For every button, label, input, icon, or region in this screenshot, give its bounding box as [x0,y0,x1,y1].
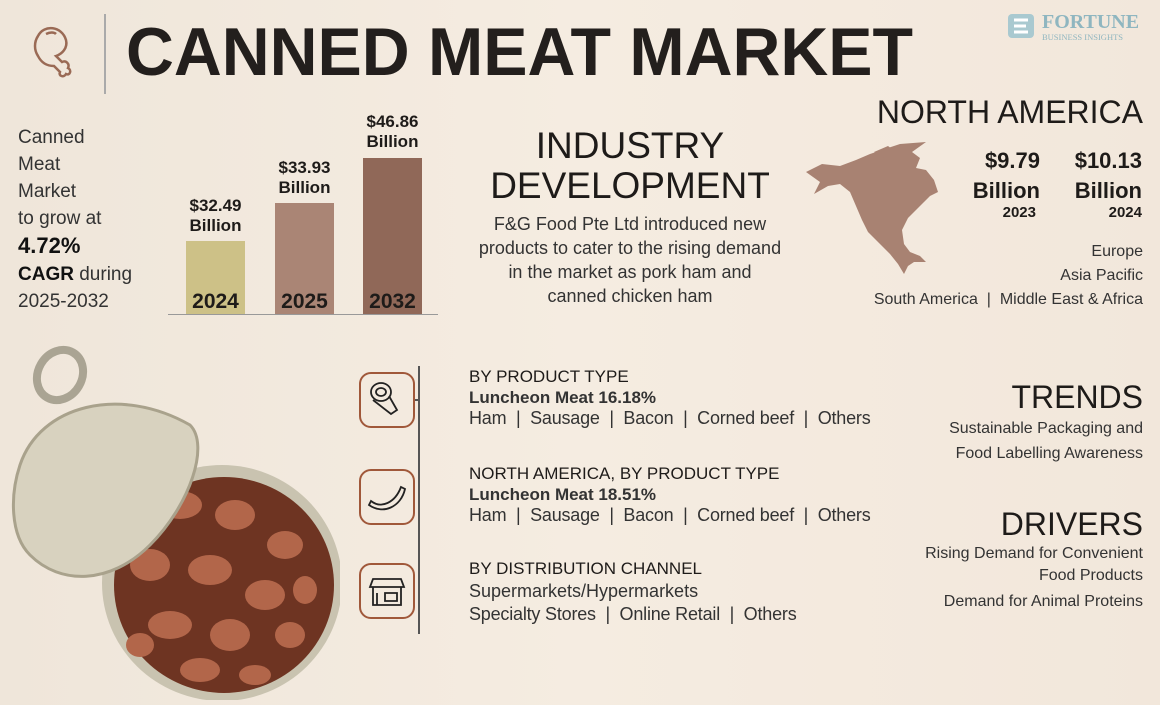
bar chart: $32.49 [190,196,242,215]
bar chart: Billion [367,132,418,151]
segment: NA product type [469,464,871,525]
logo: FORTUNE [1042,11,1139,33]
segment: distribution: Specialty Stores | Online Retail | Others [469,604,796,624]
segments panel [359,366,871,634]
text: CAGR: to grow at [18,208,101,229]
bar chart: 2032 [369,290,416,313]
segment: product type: BY PRODUCT TYPE [469,367,629,386]
regions [874,243,1144,308]
segment: NA product type: Luncheon Meat 18.51% [469,485,656,504]
text: CAGR: CAGR during [18,264,132,285]
text: 2023 [1003,204,1036,221]
icon: chicken leg [34,26,72,78]
logo [1008,11,1139,42]
na values: Billion [973,178,1040,203]
trends: TRENDS [1011,379,1143,415]
trends [949,379,1143,462]
divider [104,14,106,94]
bar chart: $46.86 [366,112,418,131]
title: CANNED MEAT MARKET [126,14,913,90]
drivers: Demand for Animal Proteins [944,593,1143,610]
industry development: products to cater to the rising demand [479,238,781,258]
image: open can [12,346,340,700]
text: CAGR: Meat [18,154,60,175]
segment: distribution: Supermarkets/Hypermarkets [469,581,698,601]
industry development: F&G Food Pte Ltd introduced new [494,214,766,234]
segment: NA product type: NORTH AMERICA, BY PRODUCT TYPE [469,464,779,483]
text: CAGR: 4.72% [18,233,80,258]
text: CAGR: 2025-2032 [18,291,109,312]
north america heading: NORTH AMERICA [877,94,1143,130]
na values [973,148,1040,203]
bar chart [168,112,438,315]
segment: NA product type: Ham | Sausage | Bacon | Corned beef | Others [469,505,871,525]
regions: South America | Middle East & Africa [874,291,1143,308]
bar chart: 2025 [281,290,328,313]
text: CAGR [18,127,132,312]
text: CAGR: Market [18,181,76,202]
segment: product type: Luncheon Meat 16.18% [469,388,656,407]
industry development: INDUSTRY [536,125,724,166]
bar chart: Billion [190,216,241,235]
drivers: Food Products [1039,567,1143,584]
segment: distribution [469,559,796,624]
bar chart: Billion [279,178,330,197]
map: north america [806,142,938,274]
trends: Food Labelling Awareness [956,445,1143,462]
bar chart: $33.93 [278,158,330,177]
regions: Europe [1091,243,1143,260]
industry development: canned chicken ham [547,286,713,306]
segment: product type [469,367,871,428]
na values: $9.79 [985,148,1040,173]
industry development [479,125,781,306]
icon: sausage [359,469,415,525]
drivers [925,506,1143,610]
regions: Asia Pacific [1060,267,1143,284]
text: $10.13 [1075,148,1142,173]
industry development: DEVELOPMENT [490,165,770,206]
text: 2024 [1109,204,1142,221]
trends: Sustainable Packaging and [949,420,1143,437]
icon: store [359,563,415,619]
text: CAGR: Canned [18,127,85,148]
segment: product type: Ham | Sausage | Bacon | Corned beef | Others [469,408,871,428]
industry development: in the market as pork ham and [508,262,752,282]
bar chart: 2024 [192,290,239,313]
icon: ham [359,372,415,428]
drivers: DRIVERS [1001,506,1143,542]
text: Billion [1075,178,1142,203]
drivers: Rising Demand for Convenient [925,545,1143,562]
segment: distribution: BY DISTRIBUTION CHANNEL [469,559,702,578]
logo: BUSINESS INSIGHTS [1042,32,1123,42]
